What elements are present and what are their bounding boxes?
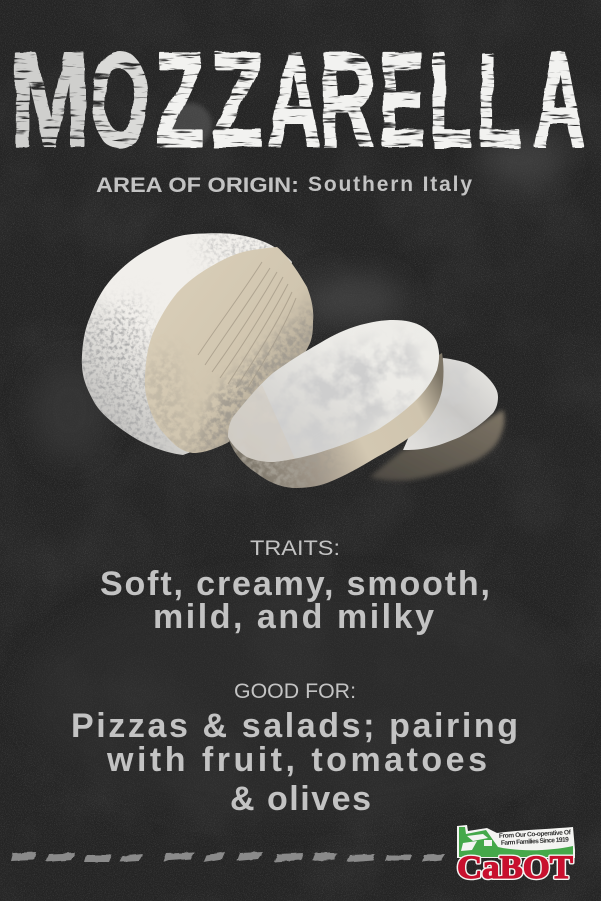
title: MOZZARELLA: Z — [211, 25, 263, 175]
title: MOZZARELLA: E — [379, 24, 425, 175]
traits heading: TRAITS: — [250, 537, 340, 560]
area of origin line — [96, 173, 472, 197]
slice 2: white face — [403, 358, 498, 450]
logo: wordmark: CaBOT — [457, 850, 573, 886]
illustration: sliced mozzarella ball — [60, 225, 504, 495]
title: MOZZARELLA: L — [477, 25, 521, 175]
title: MOZZARELLA: Z — [155, 26, 204, 175]
good for text: with fruit, tomatoes — [106, 741, 487, 779]
logo: white flag backing — [457, 825, 575, 858]
logo: tagline: Farm Families Since 1919 — [501, 836, 569, 847]
good for text: & olives — [230, 780, 371, 818]
logo: barn roof — [461, 834, 488, 851]
good for text: Pizzas & salads; pairing — [71, 707, 518, 745]
logo: green barn and band — [459, 827, 573, 857]
title: MOZZARELLA: A — [533, 25, 585, 175]
traits text: mild, and milky — [153, 598, 434, 636]
title: MOZZARELLA: O — [90, 26, 149, 175]
title: MOZZARELLA: M — [10, 24, 90, 175]
good for heading: GOOD FOR: — [234, 680, 356, 703]
traits text: Soft, creamy, smooth, — [100, 565, 490, 603]
ball: cut face — [144, 247, 314, 453]
logo: barn window — [484, 840, 492, 846]
logo: tagline: From Our Co-operative Of — [499, 829, 572, 840]
area of origin line: Southern Italy — [308, 173, 472, 196]
logo: tagline — [499, 829, 572, 847]
traits text — [100, 565, 490, 636]
logo: wordmark outline: CaBOT — [457, 850, 573, 886]
good for text — [71, 707, 518, 818]
area of origin line: AREA OF ORIGIN: — [96, 174, 299, 197]
dashed chalk line — [11, 852, 445, 862]
slice 2: rear shadow edge — [370, 410, 504, 481]
title: MOZZARELLA: R — [319, 26, 375, 175]
ball: white rind — [82, 233, 292, 455]
slice 1: tan edge — [225, 350, 447, 495]
title: MOZZARELLA: A — [268, 25, 320, 175]
slice 1: white face — [228, 320, 440, 462]
logo: Cabot — [457, 825, 575, 886]
title: MOZZARELLA: L — [429, 25, 472, 175]
title: MOZZARELLA — [10, 24, 585, 175]
